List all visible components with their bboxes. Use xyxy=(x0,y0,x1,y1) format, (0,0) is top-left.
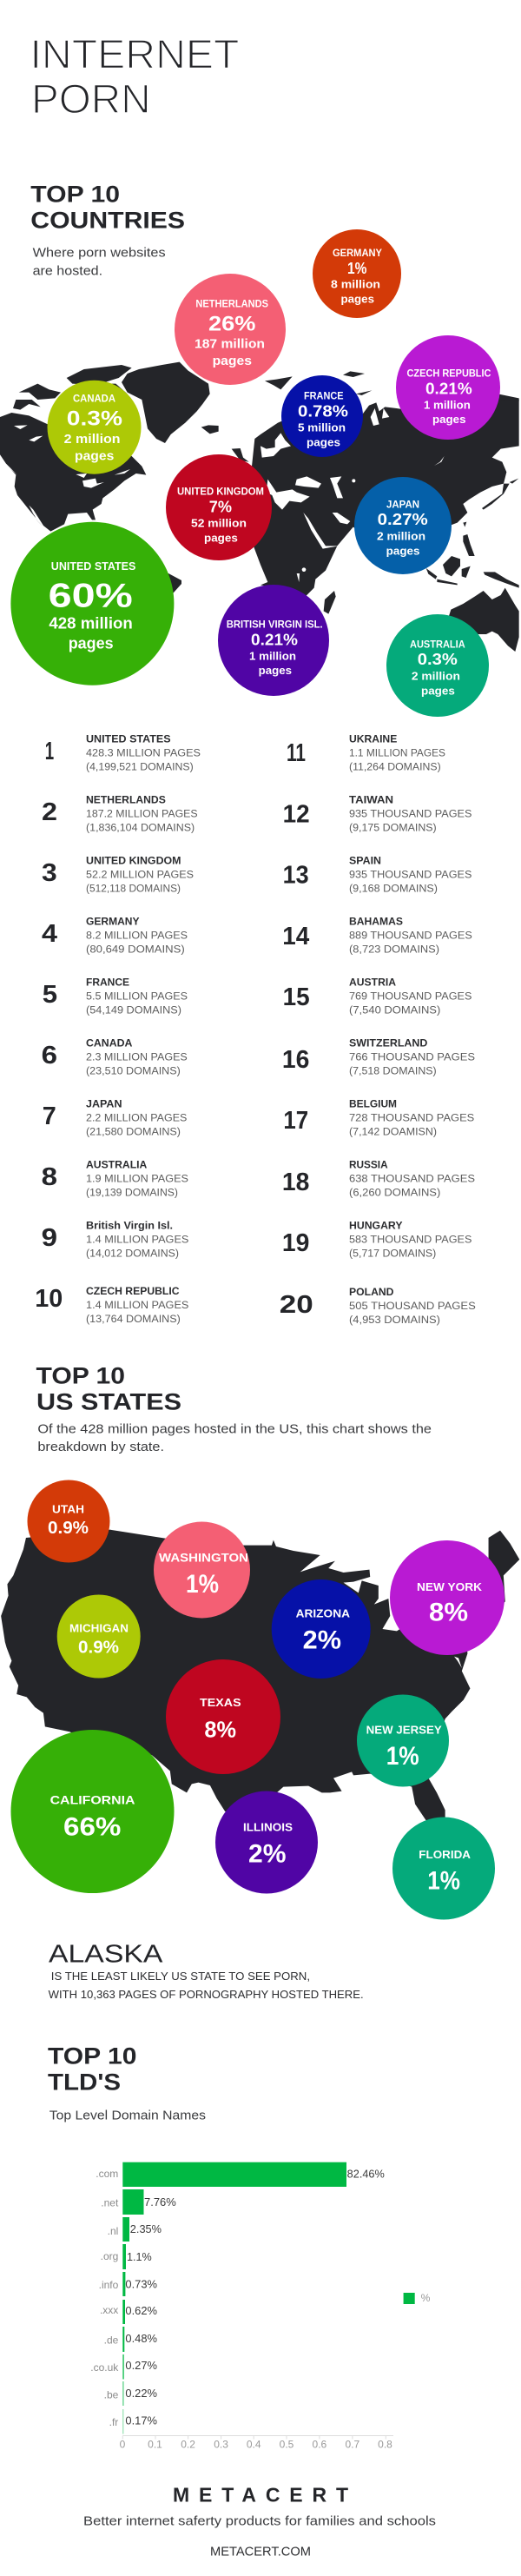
rank 1: 428.3 MILLION PAGES xyxy=(86,749,201,759)
bubble: illinois xyxy=(215,1791,318,1894)
bubble: canada: 2 million xyxy=(64,433,121,447)
rank 17 xyxy=(283,1099,475,1138)
bubble: united states xyxy=(10,522,174,685)
bubble: new jersey xyxy=(357,1694,449,1786)
bubble: new york: NEW YORK xyxy=(417,1580,483,1593)
rank 9: 9 xyxy=(42,1224,57,1252)
rank 8: AUSTRALIA xyxy=(86,1160,147,1170)
category labels: .co.uk xyxy=(90,2361,119,2374)
rank 20: 20 xyxy=(280,1291,313,1319)
rank 3: 3 xyxy=(42,859,57,887)
category labels: .xxx xyxy=(100,2304,118,2316)
text: us states intro xyxy=(37,1422,432,1454)
world map xyxy=(0,362,519,652)
rank 6: 6 xyxy=(42,1042,57,1069)
bubble: australia: pages xyxy=(421,684,455,697)
bubble: washington: WASHINGTON xyxy=(159,1551,248,1565)
rank 9: (14,012 DOMAINS) xyxy=(86,1249,179,1260)
heading: top 10 us states: TOP 10 xyxy=(36,1363,125,1389)
callout: alaska xyxy=(49,1940,364,2001)
rank 5: FRANCE xyxy=(86,977,129,988)
rank 8 xyxy=(42,1160,188,1199)
bubble: france: FRANCE xyxy=(304,391,344,401)
bubble: united kingdom: 52 million xyxy=(191,517,247,530)
bubble: california: 66% xyxy=(63,1812,121,1841)
category labels: .com xyxy=(96,2168,118,2180)
rank 15 xyxy=(283,977,472,1016)
rank 4: (80,649 DOMAINS) xyxy=(86,945,185,956)
category labels: .info xyxy=(99,2279,119,2291)
bubble: arizona xyxy=(272,1579,371,1679)
rank 13: 13 xyxy=(283,862,309,890)
rank 7 xyxy=(43,1099,188,1138)
rank 2: (1,836,104 DOMAINS) xyxy=(86,824,195,834)
rank 19 xyxy=(282,1221,472,1260)
text: countries intro xyxy=(33,247,166,279)
rank 18: RUSSIA xyxy=(349,1160,388,1170)
rank 14 xyxy=(282,917,472,956)
rank 17: 17 xyxy=(283,1107,308,1135)
rank 4: 4 xyxy=(42,920,57,948)
bubble: new jersey: NEW JERSEY xyxy=(366,1725,442,1737)
heading: top 10 tlds: TOP 10 xyxy=(48,2043,136,2069)
rank 4 xyxy=(42,917,188,956)
ranking list: top 20 countries xyxy=(35,734,476,1326)
rank 18 xyxy=(282,1160,475,1199)
bubble: california xyxy=(10,1730,174,1893)
value labels: 0.62% xyxy=(125,2305,157,2317)
value labels: 0.27% xyxy=(125,2360,157,2372)
bubble: united states: 428 million xyxy=(49,613,133,632)
bubble: netherlands: 187 million xyxy=(195,338,265,352)
rank 10 xyxy=(35,1285,189,1325)
bubble: united kingdom: 7% xyxy=(209,498,232,515)
rank 16: (7,518 DOMAINS) xyxy=(349,1067,437,1077)
rank 12: 935 THOUSAND PAGES xyxy=(349,810,472,820)
rank 7: (21,580 DOMAINS) xyxy=(86,1128,181,1138)
rank 18: 638 THOUSAND PAGES xyxy=(349,1175,475,1185)
category labels: .fr xyxy=(109,2416,118,2428)
rank 8: 8 xyxy=(42,1163,57,1191)
rank 1 xyxy=(45,734,201,773)
rank 20: (4,953 DOMAINS) xyxy=(349,1315,440,1326)
callout: alaska: IS THE LEAST LIKELY US STATE TO SEE PORN, xyxy=(51,1970,310,1983)
rank 2: 2 xyxy=(42,798,57,826)
rank 7: JAPAN xyxy=(86,1099,122,1109)
rank 9 xyxy=(42,1221,189,1260)
heading: top 10 us states xyxy=(36,1363,181,1415)
rank 12: 12 xyxy=(283,801,310,829)
rank 3: (512,118 DOMAINS) xyxy=(86,884,181,895)
footer: metacert brand: METACERT.COM xyxy=(210,2545,311,2559)
category labels: .net xyxy=(101,2196,119,2208)
rank 6 xyxy=(42,1038,188,1077)
value labels: 0.17% xyxy=(125,2415,157,2427)
rank 9: 1.4 MILLION PAGES xyxy=(86,1235,189,1246)
bubble: canada: CANADA xyxy=(73,394,115,405)
rank 14: 14 xyxy=(282,923,309,950)
rank 12 xyxy=(283,795,472,834)
category labels: .be xyxy=(104,2389,119,2401)
bubble: michigan: 0.9% xyxy=(78,1639,119,1658)
rank 13: (9,168 DOMAINS) xyxy=(349,884,438,895)
rank 19: 583 THOUSAND PAGES xyxy=(349,1235,472,1246)
rank 17: BELGIUM xyxy=(349,1099,397,1109)
rank 11: (11,264 DOMAINS) xyxy=(349,763,441,773)
bubble: washington: 1% xyxy=(186,1570,219,1599)
rank 16 xyxy=(282,1038,475,1077)
rank 15: AUSTRIA xyxy=(349,977,396,988)
bubble: michigan xyxy=(57,1595,141,1679)
bubble: illinois: 2% xyxy=(248,1839,287,1868)
bubble: united states: 60% xyxy=(49,577,133,614)
value labels xyxy=(125,2169,385,2427)
rank 2 xyxy=(42,795,198,834)
heading: top 10 countries: TOP 10 xyxy=(30,181,120,207)
rank 6: 2.3 MILLION PAGES xyxy=(86,1053,188,1063)
heading: top 10 tlds xyxy=(48,2043,136,2096)
bubble: utah: 0.9% xyxy=(48,1519,89,1538)
bubble: united states: pages xyxy=(69,634,114,652)
bubble: canada: 0.3% xyxy=(67,407,122,430)
bubble: california: CALIFORNIA xyxy=(50,1793,135,1807)
bubble: texas: TEXAS xyxy=(200,1697,241,1709)
title xyxy=(30,30,240,122)
rank 5: 5 xyxy=(43,981,57,1009)
text: countries intro: are hosted. xyxy=(33,265,102,279)
category labels xyxy=(90,2168,119,2428)
rank 18: 18 xyxy=(282,1169,309,1196)
bubble: washington xyxy=(154,1522,250,1618)
title: PORN xyxy=(31,76,151,122)
bubble: canada: pages xyxy=(75,449,114,463)
us map xyxy=(1,1530,519,1822)
rank 4: 8.2 MILLION PAGES xyxy=(86,931,188,942)
bubble: british virgin islands: 1 million xyxy=(249,649,296,662)
rank 17: (7,142 DOAMISN) xyxy=(349,1128,437,1138)
rank 15: 15 xyxy=(283,983,310,1011)
rank 19: (5,717 DOMAINS) xyxy=(349,1249,436,1260)
rank 13: SPAIN xyxy=(349,856,381,866)
bubble: illinois: ILLINOIS xyxy=(243,1821,293,1833)
bubble: australia: 2 million xyxy=(412,669,460,682)
bubble: british virgin islands: 0.21% xyxy=(251,631,298,648)
heading: top 10 us states: US STATES xyxy=(36,1389,181,1415)
bubble: british virgin islands: BRITISH VIRGIN ISL. xyxy=(227,620,323,631)
heading: top 10 countries xyxy=(30,181,185,234)
rank 11: UKRAINE xyxy=(349,734,398,745)
callout: alaska: WITH 10,363 PAGES OF PORNOGRAPHY HOSTED THERE. xyxy=(49,1989,364,2001)
rank 11: 1.1 MILLION PAGES xyxy=(349,749,445,759)
rank 16: 16 xyxy=(282,1046,309,1074)
rank 7: 2.2 MILLION PAGES xyxy=(86,1114,188,1124)
value labels: 2.35% xyxy=(130,2223,162,2235)
bubble: japan: 0.27% xyxy=(378,511,428,528)
text: us states intro: Of the 428 million pages hosted in the US, this chart shows the xyxy=(37,1422,432,1436)
bubble: france xyxy=(281,375,363,457)
bubble: japan: pages xyxy=(386,544,420,557)
value labels: 1.1% xyxy=(127,2251,152,2263)
bubble: new york: 8% xyxy=(429,1599,468,1627)
rank 5: 5.5 MILLION PAGES xyxy=(86,992,188,1003)
rank 11 xyxy=(287,734,445,773)
bubble: czech republic: pages xyxy=(432,413,465,426)
footer: metacert brand xyxy=(83,2483,436,2559)
bar chart: top level domains xyxy=(90,2162,431,2450)
x axis xyxy=(120,2436,393,2450)
rank 6: CANADA xyxy=(86,1038,132,1049)
rank 3: UNITED KINGDOM xyxy=(86,856,181,866)
category labels: .org xyxy=(101,2250,118,2262)
bubble: florida xyxy=(392,1818,495,1920)
bubble: united kingdom: UNITED KINGDOM xyxy=(177,487,264,497)
bubble: united kingdom xyxy=(166,454,272,560)
rank 15: (7,540 DOMAINS) xyxy=(349,1006,440,1016)
bubble: germany: 8 million xyxy=(331,278,380,291)
x axis: 0.5 xyxy=(280,2438,294,2450)
bubble: new jersey: 1% xyxy=(386,1742,419,1771)
rank 14: 889 THOUSAND PAGES xyxy=(349,931,472,942)
text: us states intro: breakdown by state. xyxy=(37,1440,164,1454)
bubble: czech republic xyxy=(396,335,500,440)
bubble: japan xyxy=(354,477,452,574)
bubble chart: countries xyxy=(10,229,500,717)
bubble: arizona: 2% xyxy=(303,1626,341,1654)
bubble: japan: 2 million xyxy=(377,530,425,543)
x axis: 0.7 xyxy=(346,2438,360,2450)
value labels: 7.76% xyxy=(144,2196,176,2208)
bubble: czech republic: 0.21% xyxy=(425,380,472,397)
bubble: czech republic: CZECH REPUBLIC xyxy=(406,368,491,379)
bubble: germany: GERMANY xyxy=(333,248,382,259)
rank 17: 728 THOUSAND PAGES xyxy=(349,1114,475,1124)
category labels: .nl xyxy=(108,2225,118,2237)
bubble: netherlands: NETHERLANDS xyxy=(195,299,268,309)
bubble: australia: AUSTRALIA xyxy=(410,640,465,651)
bubble: texas xyxy=(166,1659,280,1774)
value labels: 0.48% xyxy=(125,2333,157,2345)
rank 12: TAIWAN xyxy=(349,795,393,805)
heading: top 10 countries: COUNTRIES xyxy=(30,208,185,234)
rank 2: NETHERLANDS xyxy=(86,795,166,805)
bubble: czech republic: 1 million xyxy=(424,399,471,412)
footer: metacert brand: Better internet saferty products for families and schools xyxy=(83,2514,436,2529)
bubble: united kingdom: pages xyxy=(204,531,238,544)
rank 20: 505 THOUSAND PAGES xyxy=(349,1301,476,1312)
rank 7: 7 xyxy=(43,1103,56,1130)
bubble: netherlands: 26% xyxy=(208,313,255,336)
x axis: 0.8 xyxy=(378,2438,392,2450)
bubble chart: us states xyxy=(10,1480,505,1920)
rank 8: (19,139 DOMAINS) xyxy=(86,1189,178,1199)
bubble: netherlands: pages xyxy=(213,354,252,368)
rank 3 xyxy=(42,856,194,895)
rank 1: 1 xyxy=(45,738,54,765)
rank 18: (6,260 DOMAINS) xyxy=(349,1189,440,1199)
rank 19: HUNGARY xyxy=(349,1221,403,1231)
bubble: japan: JAPAN xyxy=(386,500,419,510)
value labels: 82.46% xyxy=(347,2169,385,2181)
rank 15: 769 THOUSAND PAGES xyxy=(349,992,472,1003)
bubble: british virgin islands xyxy=(218,585,329,696)
bubble: florida: FLORIDA xyxy=(419,1849,471,1861)
rank 12: (9,175 DOMAINS) xyxy=(349,824,437,834)
bubble: netherlands xyxy=(175,274,286,385)
bubble: florida: 1% xyxy=(427,1866,460,1895)
x axis: 0.3 xyxy=(214,2438,228,2450)
rank 10: CZECH REPUBLIC xyxy=(86,1287,179,1297)
bubble: france: 0.78% xyxy=(298,402,348,420)
rank 10: 10 xyxy=(35,1285,63,1313)
rank 16: 766 THOUSAND PAGES xyxy=(349,1053,475,1063)
bubble: canada xyxy=(47,381,141,474)
x axis: 0.2 xyxy=(181,2438,195,2450)
rank 3: 52.2 MILLION PAGES xyxy=(86,871,194,881)
bars xyxy=(122,2162,346,2434)
bubble: australia xyxy=(386,614,489,717)
rank 16: SWITZERLAND xyxy=(349,1038,427,1049)
title: INTERNET xyxy=(30,30,240,76)
bubble: texas: 8% xyxy=(204,1716,236,1742)
bubble: new york xyxy=(390,1540,505,1655)
x axis: 0.1 xyxy=(148,2438,162,2450)
rank 5: (54,149 DOMAINS) xyxy=(86,1006,181,1016)
bubble: utah: UTAH xyxy=(52,1504,84,1516)
heading: top 10 tlds: TLD'S xyxy=(48,2069,121,2096)
bubble: british virgin islands: pages xyxy=(259,664,292,677)
value labels: 0.22% xyxy=(125,2387,157,2400)
rank 1: (4,199,521 DOMAINS) xyxy=(86,763,194,773)
bubble: germany: pages xyxy=(340,292,374,305)
x axis: 0.4 xyxy=(247,2438,261,2450)
rank 10: (13,764 DOMAINS) xyxy=(86,1314,181,1325)
rank 6: (23,510 DOMAINS) xyxy=(86,1067,181,1077)
x axis: 0 xyxy=(120,2438,126,2450)
rank 4: GERMANY xyxy=(86,917,140,927)
legend xyxy=(404,2292,431,2304)
rank 14: (8,723 DOMAINS) xyxy=(349,945,439,956)
bubble: australia: 0.3% xyxy=(418,651,458,668)
rank 2: 187.2 MILLION PAGES xyxy=(86,810,198,820)
bubble: arizona: ARIZONA xyxy=(296,1608,350,1620)
bubble: france: pages xyxy=(307,435,340,448)
rank 13 xyxy=(283,856,472,895)
legend: % xyxy=(421,2292,431,2304)
category labels: .de xyxy=(104,2334,119,2347)
text: tld subtitle: Top Level Domain Names xyxy=(49,2109,206,2122)
rank 1: UNITED STATES xyxy=(86,734,171,745)
rank 8: 1.9 MILLION PAGES xyxy=(86,1175,188,1185)
bubble: germany xyxy=(313,229,401,318)
bubble: germany: 1% xyxy=(347,260,366,277)
rank 14: BAHAMAS xyxy=(349,917,403,927)
rank 13: 935 THOUSAND PAGES xyxy=(349,871,472,881)
bubble: united states: UNITED STATES xyxy=(51,560,136,573)
bubble: michigan: MICHIGAN xyxy=(69,1622,129,1634)
rank 5 xyxy=(43,977,188,1016)
value labels: 0.73% xyxy=(125,2279,157,2291)
rank 20: POLAND xyxy=(349,1288,394,1298)
rank 19: 19 xyxy=(282,1229,309,1257)
footer: metacert brand: METACERT xyxy=(173,2483,348,2506)
text: countries intro: Where porn websites xyxy=(33,247,166,261)
bubble: france: 5 million xyxy=(298,421,346,434)
bubble: utah xyxy=(28,1480,109,1562)
rank 20 xyxy=(280,1288,476,1326)
rank 11: 11 xyxy=(287,739,306,767)
rank 9: British Virgin Isl. xyxy=(86,1221,173,1231)
x axis: 0.6 xyxy=(313,2438,327,2450)
callout: alaska: ALASKA xyxy=(49,1940,163,1968)
rank 10: 1.4 MILLION PAGES xyxy=(86,1301,189,1311)
